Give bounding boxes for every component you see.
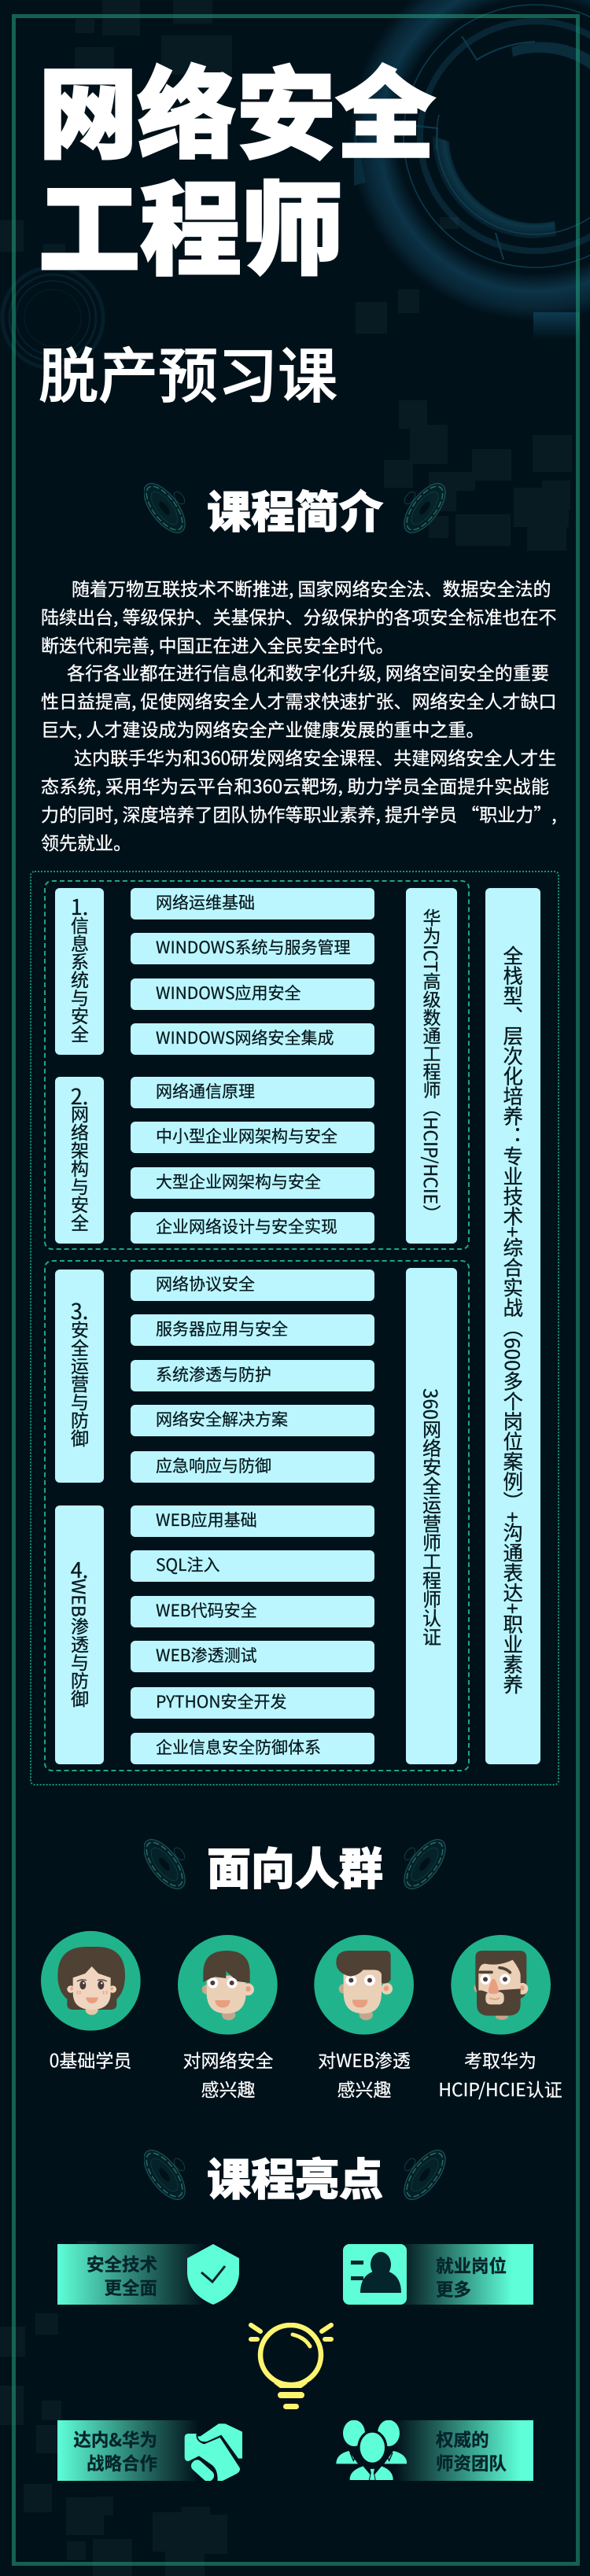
group box: Huawei stage <box>44 880 470 1250</box>
modules of category 3 <box>131 1270 374 1483</box>
certification: Huawei ICT <box>406 888 457 1244</box>
text block: course introduction: 巨大, 人才建设成为网络安全产业健康发展的重中之重。 <box>41 715 485 742</box>
modules of category 2: 企业网络设计与安全实现 <box>156 1214 337 1238</box>
avatar: woman <box>41 1931 141 2031</box>
modules of category 4: WEB代码安全 <box>156 1598 257 1622</box>
category 2 <box>55 1077 104 1244</box>
icon: light bulb <box>249 2323 334 2409</box>
heading: course intro: 课程简介 <box>207 477 383 541</box>
label: interested in network security: 感兴趣 <box>201 2075 255 2102</box>
modules of category 2: 大型企业网架构与安全 <box>156 1170 321 1193</box>
modules of category 4: 企业信息安全防御体系 <box>156 1735 321 1759</box>
card text: 师资团队 <box>436 2450 507 2475</box>
modules of category 2: 网络通信原理 <box>156 1079 255 1103</box>
category 1: 1. <box>71 890 88 921</box>
panel: curriculum <box>30 871 559 1786</box>
subtitle: 脱产预习课 <box>39 328 337 415</box>
modules of category 1 <box>131 888 374 1055</box>
card text: 安全技术 <box>87 2251 157 2276</box>
category 1 <box>55 888 104 1055</box>
modules of category 2 <box>131 1077 374 1244</box>
card text: 就业岗位 <box>436 2253 507 2278</box>
category 4: WEB渗透与防御 <box>66 1579 93 1708</box>
icon: heading ornaments, intro <box>144 483 446 533</box>
label: interested in web pentest <box>318 2046 411 2102</box>
text block: course introduction: 领先就业。 <box>41 828 131 855</box>
modules of category 4: WEB应用基础 <box>156 1508 257 1531</box>
column: full-stack training summary <box>485 888 540 1764</box>
text block: course introduction: 断迭代和完善, 中国正在进入全民安全时代。 <box>41 631 394 658</box>
modules of category 1: WINDOWS系统与服务管理 <box>156 935 350 959</box>
avatars: target audience <box>41 1931 551 2035</box>
label: interested in web pentest: 感兴趣 <box>337 2075 392 2102</box>
modules of category 4 <box>131 1505 374 1764</box>
card text: 更多 <box>436 2276 471 2301</box>
column: full-stack training summary: 全栈型、层次化培养：专业技术+综合实战（600多个岗位案例）+沟通表达+职业素养 <box>499 945 528 1694</box>
card: Tedu and Huawei partnership <box>57 2420 242 2481</box>
category 3: 3. <box>71 1295 88 1325</box>
label: Huawei certification: HCIP/HCIE认证 <box>438 2075 562 2102</box>
avatar: man with quiff <box>314 1935 414 2035</box>
category 2: 2. <box>71 1080 88 1111</box>
label: interested in network security <box>183 2046 274 2102</box>
card text <box>73 2427 157 2475</box>
category 4 <box>55 1505 104 1764</box>
label: interested in web pentest: 对WEB渗透 <box>318 2046 411 2073</box>
category 2: 网络架构与安全 <box>66 1105 93 1232</box>
card text: 战略合作 <box>87 2450 157 2475</box>
modules of category 2: 中小型企业网架构与安全 <box>156 1124 337 1148</box>
icon: id card <box>343 2244 407 2305</box>
modules of category 3: 系统渗透与防护 <box>156 1362 271 1386</box>
group box: 360 stage <box>44 1260 470 1771</box>
card: comprehensive security skills <box>57 2244 239 2305</box>
icon: heading ornaments, highlights <box>144 2150 446 2200</box>
certification: 360: 360网络安全运营师工程师认证 <box>419 1388 445 1646</box>
modules of category 1: 网络运维基础 <box>156 890 255 914</box>
icon: shield <box>187 2244 239 2305</box>
card text <box>436 2427 507 2475</box>
modules of category 4: WEB渗透测试 <box>156 1643 257 1667</box>
label: Huawei certification: 考取华为 <box>464 2046 537 2073</box>
card text <box>436 2253 507 2301</box>
label: Huawei certification <box>438 2046 562 2102</box>
text block: course introduction: 随着万物互联技术不断推进, 国家网络安全法、数据安全法的 <box>72 574 551 601</box>
icon: heading ornaments, audience <box>144 1839 446 1889</box>
category 3 <box>55 1270 104 1483</box>
text block: course introduction: 态系统, 采用华为云平台和360云靶场, 助力学员全面提升实战能 <box>41 772 549 798</box>
modules of category 1: WINDOWS应用安全 <box>156 981 301 1004</box>
modules of category 3: 应急响应与防御 <box>156 1454 271 1477</box>
label: interested in network security: 对网络安全 <box>183 2046 274 2073</box>
modules of category 3: 网络安全解决方案 <box>156 1407 288 1431</box>
title <box>39 35 437 296</box>
certification: 360 <box>406 1268 457 1764</box>
modules of category 4: PYTHON安全开发 <box>156 1690 287 1713</box>
category 1: 信息系统与安全 <box>66 916 93 1043</box>
modules of category 1: WINDOWS网络安全集成 <box>156 1026 334 1049</box>
text block: course introduction: 性日益提高, 促使网络安全人才需求快速扩张、网络安全人才缺口 <box>41 687 557 713</box>
title: 网络安全 <box>39 35 435 179</box>
category 3: 安全运营与防御 <box>66 1321 93 1447</box>
card: authoritative teachers <box>336 2420 533 2481</box>
text block: course introduction <box>41 574 557 855</box>
modules of category 3: 网络协议安全 <box>156 1272 255 1295</box>
card: more jobs <box>343 2244 533 2305</box>
avatar: boy with fringe <box>178 1935 278 2035</box>
label: beginners: 0基础学员 <box>50 2046 131 2073</box>
text block: course introduction: 各行各业都在进行信息化和数字化升级, 网络空间安全的重要 <box>67 658 549 685</box>
heading: target audience: 面向人群 <box>207 1834 383 1898</box>
card text: 更全面 <box>104 2275 157 2300</box>
modules of category 3: 服务器应用与安全 <box>156 1317 288 1340</box>
text block: course introduction: 力的同时, 深度培养了团队协作等职业素养, 提升学员 “职业力”, <box>41 800 557 827</box>
card text: 达内&华为 <box>73 2427 157 2452</box>
icon: handshake <box>184 2423 242 2481</box>
text block: course introduction: 达内联手华为和360研发网络安全课程、共建网络安全人才生 <box>74 743 556 770</box>
card text: 权威的 <box>436 2427 489 2452</box>
title: 工程师 <box>39 149 343 296</box>
heading: course highlights: 课程亮点 <box>207 2145 383 2209</box>
certification: Huawei ICT: 华为ICT高级数通工程师（HCIP/HCIE） <box>419 908 445 1222</box>
modules of category 4: SQL注入 <box>156 1553 220 1576</box>
icon: team of people <box>336 2420 407 2480</box>
avatar: bearded man <box>451 1935 551 2035</box>
text block: course introduction: 陆续出台, 等级保护、关基保护、分级保护的各项安全标准也在不 <box>41 603 557 629</box>
card text <box>87 2251 157 2300</box>
category 4: 4. <box>71 1553 88 1584</box>
